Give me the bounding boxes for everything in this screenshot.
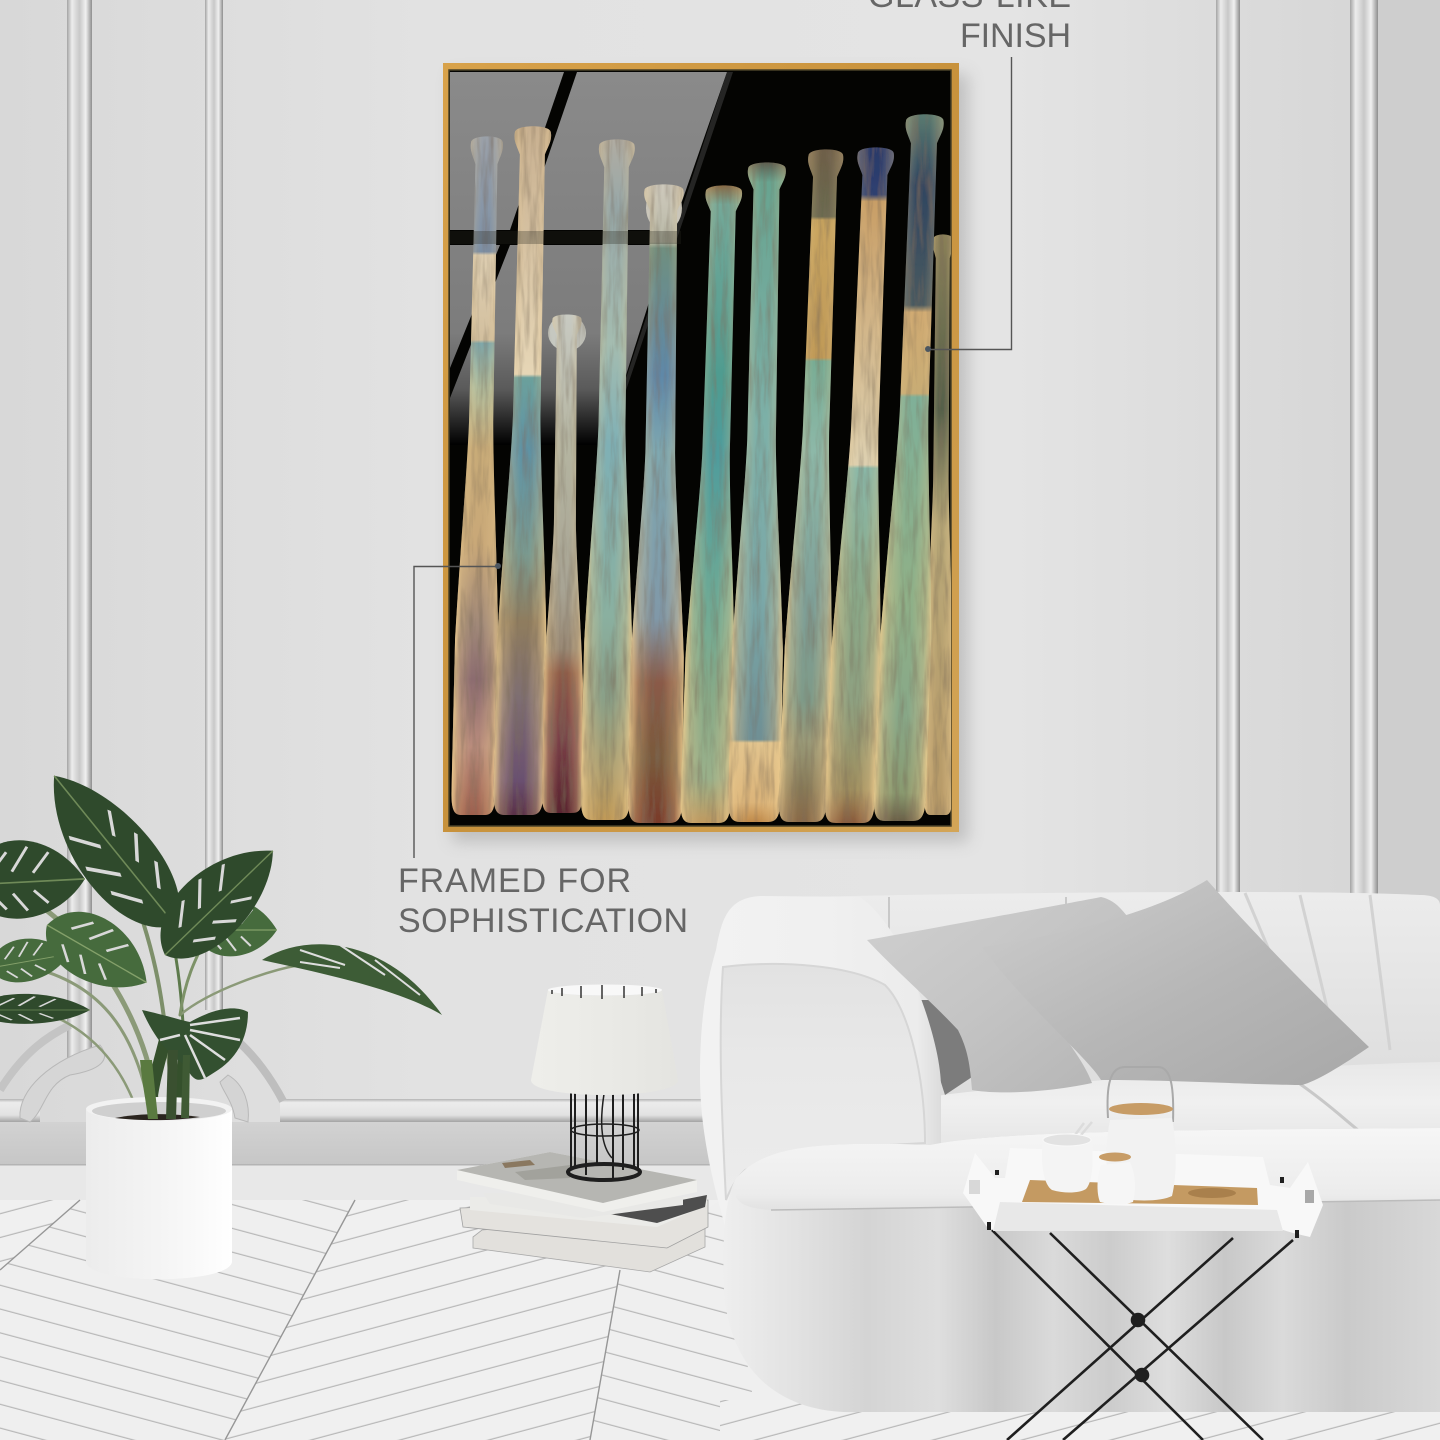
stack of books: [457, 1152, 708, 1272]
slim book: [483, 1193, 683, 1218]
callout: glass-like finish: [868, 0, 1071, 352]
tea set: [1042, 1067, 1176, 1204]
leaf: left middle: [0, 932, 72, 987]
bat 11: [924, 234, 951, 815]
pillow: rear: [867, 897, 1128, 1092]
bat 2: [494, 126, 552, 815]
tray: [963, 1148, 1323, 1238]
bat 6: [680, 185, 742, 823]
top book: [457, 1152, 697, 1212]
lamp shade: [531, 990, 678, 1095]
floor: [0, 1200, 1440, 1440]
leaf: right upper: [140, 825, 295, 978]
bat 9: [825, 147, 894, 823]
fourth book: [460, 1200, 708, 1248]
leaf: far left: [0, 994, 90, 1024]
armrest inner panel: [721, 964, 925, 1200]
tray table: [963, 1067, 1323, 1440]
leaf: center left: [32, 895, 164, 1008]
baseball bats: [449, 114, 957, 823]
callout: framed for sophistication: FRAMED FOR: [398, 862, 631, 900]
leaf: left upper: [0, 837, 87, 921]
plant stems: [10, 885, 300, 1112]
right back cushion folds: [1245, 893, 1390, 1050]
bottom book: [473, 1212, 705, 1272]
pillow shadow: [915, 1000, 975, 1095]
callout: framed for sophistication: [398, 563, 688, 940]
bat 8: [778, 149, 850, 822]
sofa back: [760, 892, 1440, 1180]
sofa armrest: [700, 896, 941, 1230]
glass reflection: [450, 72, 733, 445]
lamp wire cage: [568, 1092, 640, 1180]
bat 1: [451, 136, 503, 815]
sofa: [700, 880, 1440, 1412]
pillow: front: [982, 880, 1369, 1085]
bat 5: [628, 184, 684, 823]
bat 10: [873, 114, 951, 821]
wall art panel: [443, 63, 968, 842]
bat 7: [728, 162, 786, 822]
leaf: low center: [142, 1008, 248, 1080]
leaf: long right: [262, 944, 442, 1015]
frame shadow: [452, 74, 968, 842]
potted plant: [0, 754, 442, 1279]
callout: framed for sophistication: SOPHISTICATION: [398, 902, 688, 940]
sofa front top: [734, 1128, 1440, 1210]
white planter: [86, 1050, 232, 1279]
bat 4: [581, 139, 635, 820]
black canvas: [449, 70, 951, 826]
leaf: top large: [23, 754, 202, 950]
dark cover book: [470, 1197, 707, 1227]
bat 3: [542, 315, 587, 813]
sofa front: [723, 1128, 1440, 1412]
table legs: [992, 1230, 1293, 1440]
table lamp: [531, 984, 678, 1180]
callout: glass-like finish: FINISH: [960, 17, 1071, 55]
gold frame: [443, 63, 959, 832]
leaf: rear right: [195, 899, 277, 956]
sofa seat cushions: [930, 1062, 1440, 1180]
